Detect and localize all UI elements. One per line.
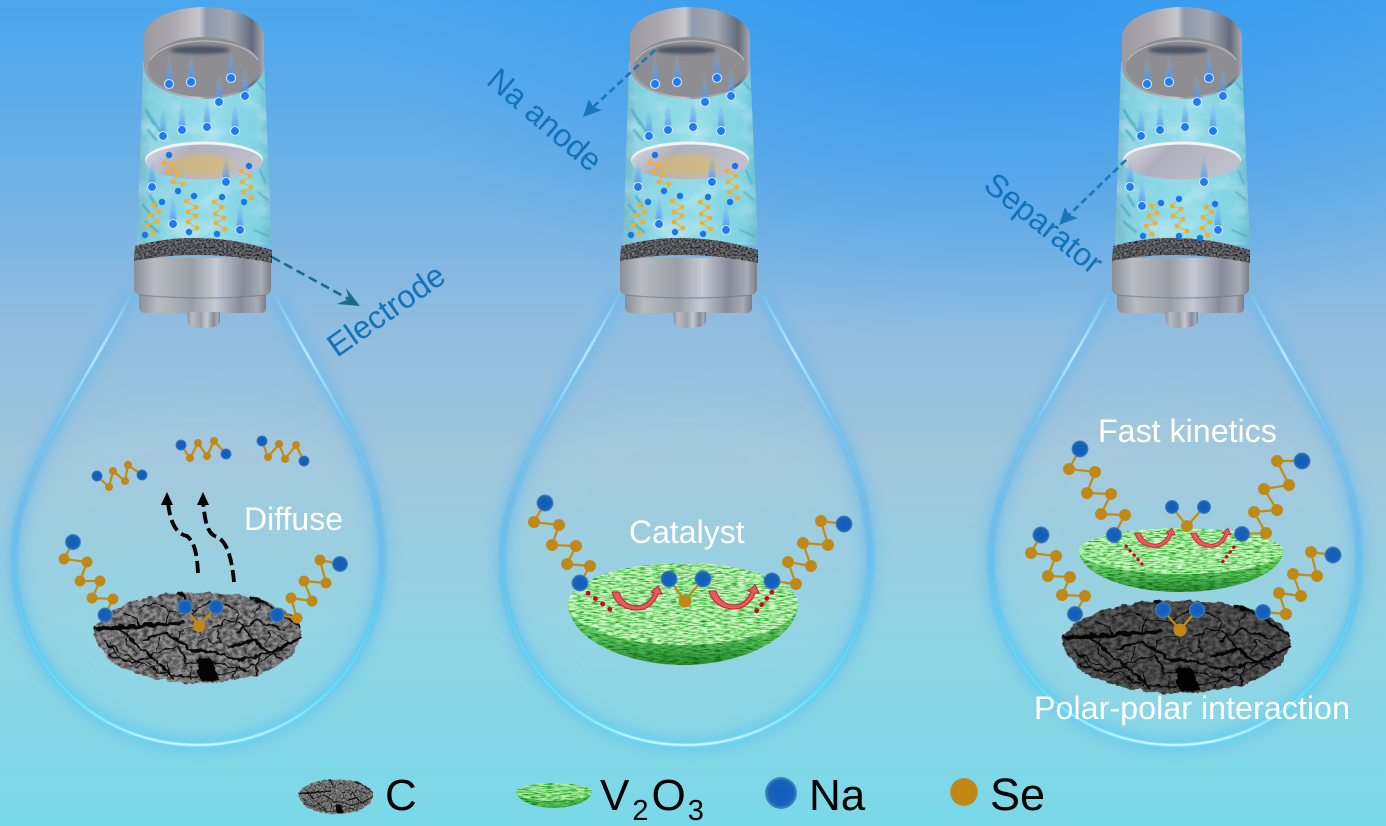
upper chain, right: [1234, 452, 1310, 542]
polyselenide chains and ions, middle cell: [628, 151, 740, 238]
dashed diffusion arrows: [161, 492, 234, 582]
legend label: V2O3: O: [652, 771, 686, 820]
arrow: electrode pointer: [272, 257, 360, 306]
long chain, left: [58, 534, 118, 622]
Na2Se above catalyst: [1165, 500, 1211, 532]
red conversion arrows: [612, 585, 759, 610]
red dotted bonds: [1126, 546, 1234, 564]
V2O3 disc: [1079, 528, 1283, 592]
light-bulb glow outline: right: [991, 292, 1359, 745]
polyselenide chains and ions between separator and electrode: [142, 151, 254, 238]
label: Polar-polar interaction: Polar-polar interaction: [1034, 690, 1350, 726]
polyselenide chains, right cell: [1140, 196, 1218, 241]
label: Electrode: Electrode: [320, 257, 452, 364]
light-bulb glow outline: left: [14, 292, 382, 745]
arrow: separator pointer: [1059, 160, 1126, 225]
carbon disc: [1064, 600, 1290, 693]
red conversion arrows: [1135, 528, 1231, 547]
legend icon: Na atom: [765, 777, 797, 809]
red dotted bonds: [588, 592, 772, 614]
legend icon: V2O3 disc: [516, 783, 592, 808]
battery: left cell with electrode: [134, 7, 272, 328]
label: Separator: Separator: [978, 165, 1110, 281]
panel: left bulb, carbon electrode with diffusing polyselenides: [58, 436, 348, 683]
lower chain, left: [1025, 526, 1091, 622]
free polyselenide molecule A: [92, 461, 148, 491]
label: Diffuse: Diffuse: [244, 501, 343, 537]
legend label: V2O3: V: [600, 771, 629, 820]
arrow: Na anode pointer: [583, 50, 655, 117]
V2O3 disc: [568, 563, 798, 665]
upper chain, left: [1063, 440, 1131, 543]
legend label: Se: Se: [990, 769, 1045, 820]
long chain, right: [764, 515, 852, 590]
carbon disc: [95, 592, 301, 683]
Na2Se on carbon: [1155, 602, 1205, 636]
battery: right cell with separator: [1112, 7, 1250, 328]
label: Fast kinetics: Fast kinetics: [1098, 413, 1277, 449]
legend icon: Se atom: [950, 778, 978, 806]
label: Catalyst: Catalyst: [629, 514, 745, 550]
Na2Se on carbon: [178, 600, 224, 632]
free polyselenide molecule C: [256, 436, 310, 466]
legend label: Na: Na: [809, 771, 866, 820]
long chain, left: [528, 494, 596, 592]
Na2Se on catalyst: [660, 570, 712, 608]
legend icon: carbon disc: [299, 779, 373, 814]
battery: middle cell with Na anode: [620, 7, 758, 328]
free polyselenide molecule B: [176, 437, 232, 462]
panel: middle bulb, V2O3 catalyst: [528, 494, 852, 665]
long chain, right: [270, 554, 348, 624]
legend label: C: C: [385, 771, 417, 820]
light-bulb glow outline: middle: [502, 292, 870, 745]
panel: right bulb, carbon plus V2O3: [1025, 413, 1350, 726]
legend: [299, 769, 1045, 826]
lower chain, right: [1255, 546, 1342, 620]
label: Na anode: Na anode: [480, 61, 609, 178]
